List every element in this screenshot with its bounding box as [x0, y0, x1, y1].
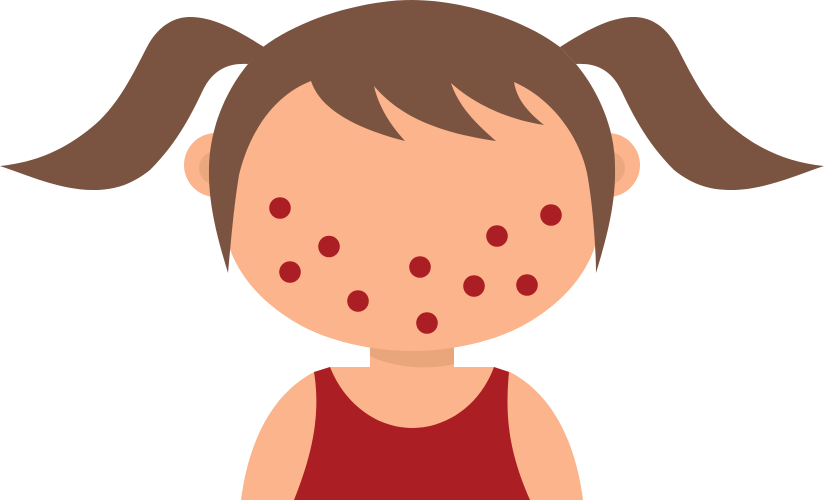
- left pigtail: [0, 17, 264, 190]
- red tank top: [294, 367, 530, 500]
- hair with bangs: [209, 0, 615, 273]
- left ear: [184, 133, 248, 197]
- red spots: [269, 197, 562, 334]
- right ear: [576, 133, 640, 197]
- face: [224, 60, 600, 351]
- neck: [370, 330, 454, 367]
- right pigtail: [560, 17, 824, 190]
- body with arms: [241, 367, 583, 500]
